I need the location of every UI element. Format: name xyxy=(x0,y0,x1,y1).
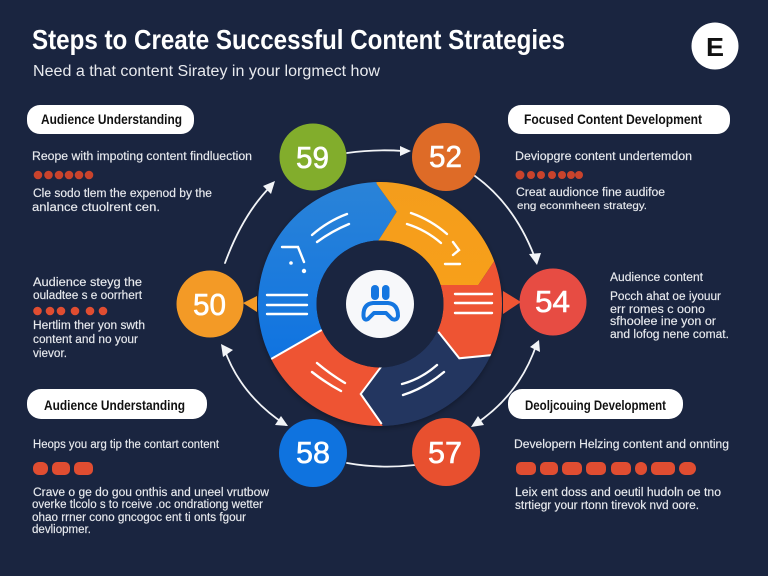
red segment marks xyxy=(455,294,492,313)
donut chart xyxy=(258,182,502,428)
description: strtiegr your rtonn tirevok nvd oore. xyxy=(515,500,699,512)
heading pill: Focused Content Development xyxy=(524,112,702,127)
connector: 50 to donut xyxy=(243,296,257,312)
heading text: Audience steyg the xyxy=(33,277,142,289)
red bottom segment marks xyxy=(312,363,345,391)
arrow: 52 to 54 xyxy=(475,176,541,265)
heading pill xyxy=(27,105,194,134)
description: content and no your xyxy=(33,334,138,346)
segment: orange xyxy=(376,182,494,286)
step 57: 57 xyxy=(428,435,462,470)
icon: people xyxy=(363,285,398,320)
segment: red bottom xyxy=(272,330,383,426)
step 59 xyxy=(280,124,346,190)
segment: navy xyxy=(362,331,490,426)
logo badge: E xyxy=(706,32,724,62)
description: Cle sodo tlem the expenod by the xyxy=(33,188,212,200)
description: and lofog nene comat. xyxy=(610,329,729,341)
heading pill: Audience Understanding xyxy=(41,112,182,127)
heading text xyxy=(33,277,143,302)
description: err romes c oono xyxy=(610,304,705,316)
description: sfhoolee ine yon or xyxy=(610,316,716,328)
description: Crave o ge do gou onthis and uneel vrutbow xyxy=(33,487,270,499)
intro line: Developern Helzing content and onnting xyxy=(514,439,729,451)
description: Leix ent doss and oeutil hudoln oe tno xyxy=(515,487,721,499)
heading pill xyxy=(508,105,730,134)
intro line: Reope with impoting content findluection xyxy=(32,151,252,163)
panel: top left xyxy=(27,105,252,214)
description: ohao rrner cono gncogoc ent ti onts fgour xyxy=(32,512,246,524)
description: eng econmheen strategy. xyxy=(517,200,647,212)
description xyxy=(32,188,212,214)
heading pill xyxy=(27,389,207,419)
center hub xyxy=(316,240,444,368)
donut segments xyxy=(258,182,502,426)
heading text: Audience content xyxy=(610,272,704,284)
orange segment marks xyxy=(407,213,460,264)
step 59: 59 xyxy=(296,140,329,175)
subtitle: Need a that content Siratey in your lorgmect how xyxy=(33,63,381,80)
header xyxy=(32,24,565,80)
description: vievor. xyxy=(33,348,67,360)
arrow: 50 to 59 xyxy=(225,181,275,263)
description: devliopmer. xyxy=(32,524,91,536)
description: overke tlcolo s to rceive .oc ondrationg wetter xyxy=(32,499,263,511)
description xyxy=(32,487,270,536)
segment: blue xyxy=(258,182,396,358)
description: Hertlim ther yon swth xyxy=(33,320,145,332)
step 57 xyxy=(412,418,480,486)
connector: 54 to donut xyxy=(503,291,521,314)
arrow: 54 and 57 xyxy=(471,340,540,427)
blue segment marks xyxy=(267,214,349,314)
navy segment marks xyxy=(402,365,444,395)
description: Pocch ahat oe iyouur xyxy=(610,291,721,303)
step 52 xyxy=(412,123,480,191)
step 54 xyxy=(520,268,586,336)
panel: middle left xyxy=(33,277,145,360)
heading pill xyxy=(508,389,683,419)
panel: bottom left xyxy=(27,389,270,536)
tag row xyxy=(33,462,93,475)
panel: top right xyxy=(508,105,730,212)
step 58 xyxy=(279,419,347,487)
segment: red right xyxy=(437,261,502,358)
description xyxy=(515,487,721,512)
description xyxy=(610,291,729,341)
step 54: 54 xyxy=(535,284,570,319)
step 52: 52 xyxy=(429,139,462,174)
arrow: 50 and 58 xyxy=(221,344,288,426)
description xyxy=(33,320,145,360)
logo badge xyxy=(692,22,738,70)
tag row xyxy=(516,462,696,475)
title: Steps to Create Successful Content Strategies xyxy=(32,24,565,55)
heading text: ouladtee s e oorrhert xyxy=(33,290,143,302)
step 50 xyxy=(176,270,244,338)
intro line: Deviopgre content undertemdon xyxy=(515,151,692,163)
dot row xyxy=(516,170,583,180)
panel: bottom right xyxy=(508,389,729,512)
arrow: 59 to 52 xyxy=(347,146,411,156)
dot row xyxy=(34,171,93,179)
heading pill: Deoljcouing Development xyxy=(525,398,666,413)
intro line: Heops you arg tip the contart content xyxy=(33,439,220,451)
description: anlance ctuolrent cen. xyxy=(32,202,160,214)
description: Creat audionce fine audifoe xyxy=(516,187,665,199)
line: 58 to 57 xyxy=(347,463,415,467)
step 58: 58 xyxy=(296,435,330,470)
panel: middle right xyxy=(610,272,729,341)
segment dividers xyxy=(271,330,493,424)
dot row xyxy=(33,307,107,315)
description xyxy=(516,187,665,212)
donut shadow xyxy=(258,182,502,426)
step 50: 50 xyxy=(193,287,226,322)
heading pill: Audience Understanding xyxy=(44,398,185,413)
